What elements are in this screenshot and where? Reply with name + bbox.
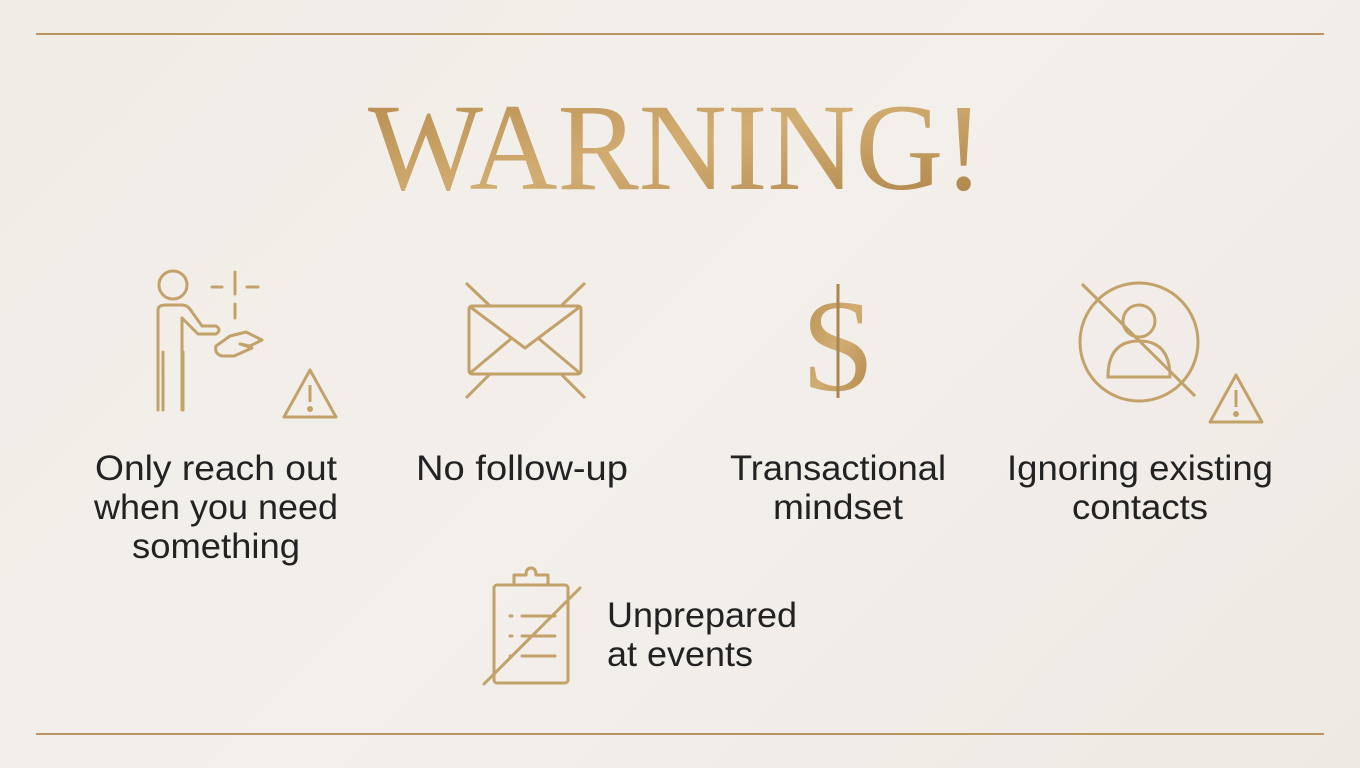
bottom rule [36,733,1324,735]
label: only reach out [93,449,338,566]
label: no follow-up: No follow-up [416,449,628,488]
icon: warning triangle 1 [284,370,336,417]
label: only reach out: when you need [93,488,338,527]
icon: warning triangle 2 [1210,375,1262,422]
top rule [36,33,1324,35]
label: unprepared at events: at events [607,635,753,674]
label: transactional mindset [730,449,946,527]
label: only reach out: something [132,527,300,566]
label: ignoring existing contacts: Ignoring existing [1007,449,1273,488]
label: unprepared at events: Unprepared [607,596,797,635]
icon: crossed clipboard [484,568,580,684]
icon: dollar sign: S [801,272,875,419]
label: ignoring existing contacts [1007,449,1273,527]
label: unprepared at events [607,596,797,674]
label: transactional mindset: Transactional [730,449,946,488]
icon: person with outstretched hand [158,271,262,410]
label: transactional mindset: mindset [773,488,903,527]
icon: crossed-out person circle [1080,283,1198,401]
label: ignoring existing contacts: contacts [1072,488,1208,527]
icon: crossed envelope [466,283,585,398]
label: only reach out: Only reach out [95,449,337,488]
title: WARNING! [368,79,984,216]
